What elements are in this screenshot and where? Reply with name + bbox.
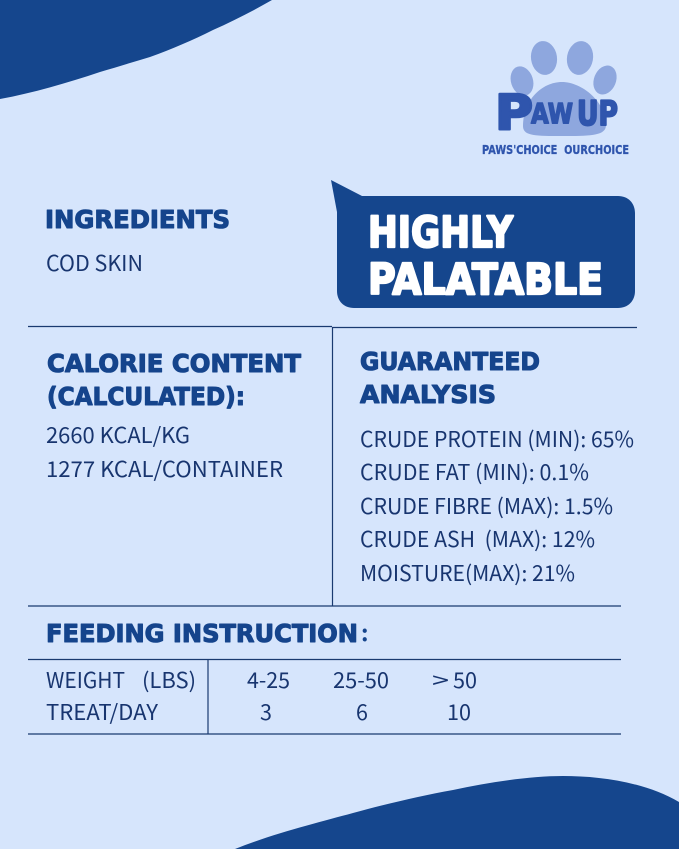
row: treat per day: 10 bbox=[447, 696, 471, 727]
guaranteed analysis list: MOISTURE(MAX): 21% bbox=[360, 557, 575, 588]
feeding instruction heading: : bbox=[361, 614, 368, 648]
callout line 2: PALATABLE bbox=[368, 255, 603, 305]
top-left wave bbox=[0, 0, 272, 99]
guaranteed analysis list: CRUDE FAT (MIN): 0.1% bbox=[360, 456, 589, 487]
row: weight: (LBS) bbox=[142, 664, 196, 695]
callout: highly palatable bbox=[331, 180, 635, 308]
logo wordmark: AW bbox=[531, 97, 573, 130]
guaranteed analysis list: CRUDE FIBRE (MAX): 1.5% bbox=[360, 490, 613, 521]
calorie content heading: CALORIE CONTENT bbox=[47, 349, 301, 378]
row: treat per day: TREAT/DAY bbox=[46, 696, 159, 727]
guaranteed analysis heading bbox=[360, 347, 540, 409]
bottom-right wave bbox=[235, 776, 679, 849]
row: weight: 50 bbox=[453, 664, 477, 695]
logo wordmark: P bbox=[495, 85, 533, 141]
guaranteed analysis heading: GUARANTEED bbox=[360, 347, 540, 376]
row: weight bbox=[46, 664, 477, 695]
row: treat per day: 6 bbox=[356, 696, 368, 727]
calorie values: 1277 KCAL/CONTAINER bbox=[46, 453, 283, 484]
feeding table bbox=[46, 664, 477, 727]
row: weight: 4-25 bbox=[247, 664, 290, 695]
icon: paw print bbox=[507, 39, 621, 136]
calorie values: 2660 KCAL/KG bbox=[46, 419, 190, 450]
logo tagline: PAWS'CHOICE OURCHOICE bbox=[482, 143, 629, 157]
table rules bbox=[28, 326, 637, 734]
calorie content subheading: (CALCULATED): bbox=[47, 382, 245, 411]
row: weight: 25-50 bbox=[333, 664, 389, 695]
guaranteed analysis list: CRUDE PROTEIN (MIN): 65% bbox=[360, 423, 634, 454]
row: weight: > bbox=[432, 664, 449, 695]
guaranteed analysis list bbox=[360, 423, 634, 588]
guaranteed analysis list: CRUDE ASH (MAX): 12% bbox=[360, 523, 595, 554]
logo: Paw Up bbox=[482, 39, 629, 157]
logo wordmark bbox=[495, 85, 618, 141]
callout line 1: HIGHLY bbox=[368, 208, 514, 258]
row: weight: WEIGHT bbox=[46, 664, 125, 695]
guaranteed analysis heading: ANALYSIS bbox=[360, 380, 496, 409]
logo wordmark: UP bbox=[577, 94, 618, 134]
row: treat per day bbox=[46, 696, 471, 727]
ingredients heading: INGREDIENTS bbox=[45, 205, 230, 234]
feeding instruction heading: FEEDING INSTRUCTION bbox=[46, 619, 358, 648]
calorie values bbox=[46, 419, 283, 484]
ingredients text: COD SKIN bbox=[46, 247, 143, 278]
row: treat per day: 3 bbox=[260, 696, 272, 727]
